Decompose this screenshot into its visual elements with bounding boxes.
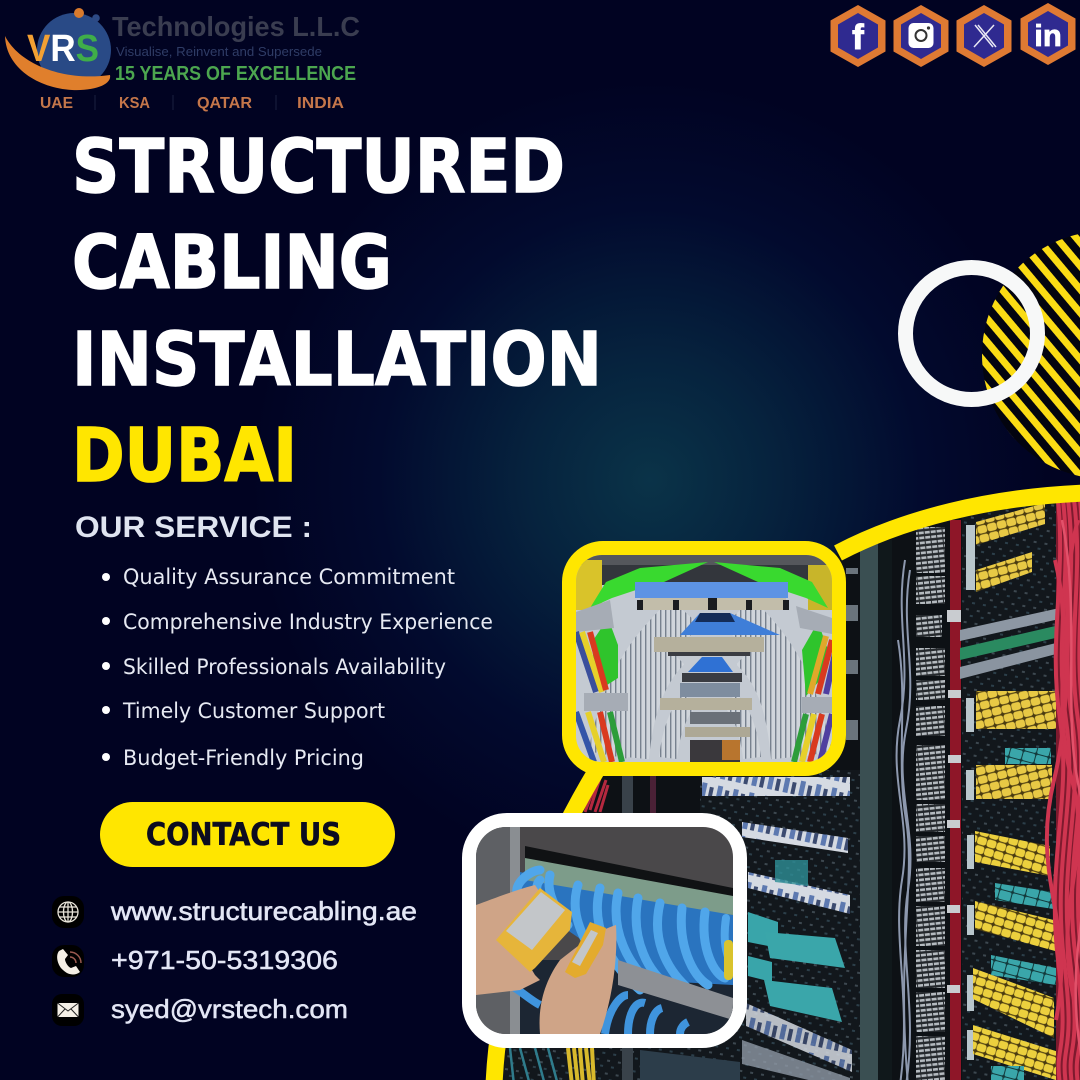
icon: linkedin	[1020, 3, 1076, 65]
striped circle decoration	[982, 231, 1080, 479]
server rack photo panel	[480, 480, 1080, 1080]
grey rail	[618, 960, 733, 1020]
side strips	[576, 560, 832, 610]
photo: technician testing blue cables with white frame	[469, 820, 740, 1041]
dark center	[682, 673, 742, 682]
hands	[476, 885, 616, 1034]
fan cables	[608, 612, 812, 758]
yellow wires lower left	[568, 1048, 594, 1080]
contact phone	[52, 945, 338, 977]
icon: envelope	[52, 994, 84, 1026]
tester device large	[496, 888, 572, 972]
countries	[40, 95, 344, 112]
services list: Timely Customer Support	[122, 699, 385, 723]
title: INSTALLATION	[72, 317, 602, 403]
panel 1	[640, 598, 786, 610]
yellow patch panels	[973, 504, 1056, 1080]
red cable bundle	[1047, 495, 1080, 1080]
blue bar	[635, 582, 788, 598]
port strips	[966, 525, 975, 1060]
teal connectors	[748, 860, 845, 1022]
services list: Comprehensive Industry Experience	[123, 610, 493, 634]
title: DUBAI	[72, 413, 297, 499]
icon: facebook: f	[852, 18, 864, 57]
logo lettering: VRS	[27, 28, 99, 70]
panel 3	[660, 698, 752, 710]
contact button	[100, 802, 395, 867]
jack row	[525, 858, 733, 915]
bright panels lower rack	[640, 777, 852, 1080]
services heading: OUR SERVICE :	[75, 511, 312, 544]
logo orange swoosh	[5, 36, 110, 90]
title: STRUCTURED	[72, 124, 565, 210]
contact website: www.structurecabling.ae	[110, 896, 417, 926]
logo	[5, 8, 360, 112]
teal wires lower left	[510, 1048, 558, 1080]
white patch panel column	[916, 527, 945, 1080]
rainbow cables right	[794, 636, 838, 762]
grey rack bars and green ports	[960, 607, 1064, 679]
white ring decoration	[906, 268, 1038, 400]
photo: patch panel with yellow frame	[569, 548, 839, 769]
title: CABLING	[72, 220, 392, 306]
title	[72, 124, 602, 499]
countries: QATAR	[197, 95, 252, 112]
bottom wires	[690, 740, 740, 762]
rainbow cables left	[576, 632, 622, 762]
tester device small	[565, 922, 606, 978]
rack dark lower	[520, 960, 733, 1034]
icon: phone	[52, 945, 84, 977]
lower blue cables	[510, 985, 688, 1034]
icon: globe	[52, 896, 84, 928]
contact button: CONTACT US	[146, 817, 341, 853]
company name: Technologies L.L.C	[112, 11, 360, 42]
wiring beside white panels	[897, 560, 911, 1080]
years of excellence: 15 YEARS OF EXCELLENCE	[115, 63, 356, 85]
jack markers	[637, 598, 789, 610]
icon: facebook	[830, 5, 886, 67]
panel 2	[654, 637, 764, 652]
red column	[947, 520, 961, 1080]
countries: KSA	[119, 95, 150, 112]
countries: INDIA	[297, 95, 344, 112]
yellow cable edge	[724, 940, 733, 980]
small rack units near post	[846, 568, 858, 740]
logo orange dot	[74, 8, 84, 18]
countries: UAE	[40, 95, 73, 112]
teal port rows	[991, 748, 1060, 1080]
icon: X	[956, 5, 1012, 67]
grey cable bars	[576, 600, 832, 713]
icon: linkedin: in	[1034, 18, 1062, 53]
green cables	[590, 562, 828, 696]
services list: Skilled Professionals Availability	[123, 655, 446, 679]
social icons	[830, 3, 1076, 67]
red cables left	[585, 778, 608, 812]
rack posts	[622, 540, 892, 1080]
services list: Quality Assurance Commitment	[123, 565, 455, 589]
blue trapezoids	[680, 613, 780, 672]
yellow panel border	[494, 493, 1080, 1080]
services list	[102, 565, 493, 770]
blue cable strands	[517, 870, 733, 990]
contact email: syed@vrstech.com	[111, 994, 348, 1024]
logo planet	[37, 13, 111, 87]
blue cable mass base	[520, 872, 733, 985]
tagline: Visualise, Reinvent and Supersede	[116, 44, 322, 59]
icon: instagram	[894, 5, 948, 67]
contact phone: +971-50-5319306	[111, 945, 338, 975]
logo blue dot	[92, 14, 100, 22]
black patch panel strip	[525, 846, 733, 900]
services list: Budget-Friendly Pricing	[123, 746, 364, 770]
top strip	[576, 555, 832, 565]
